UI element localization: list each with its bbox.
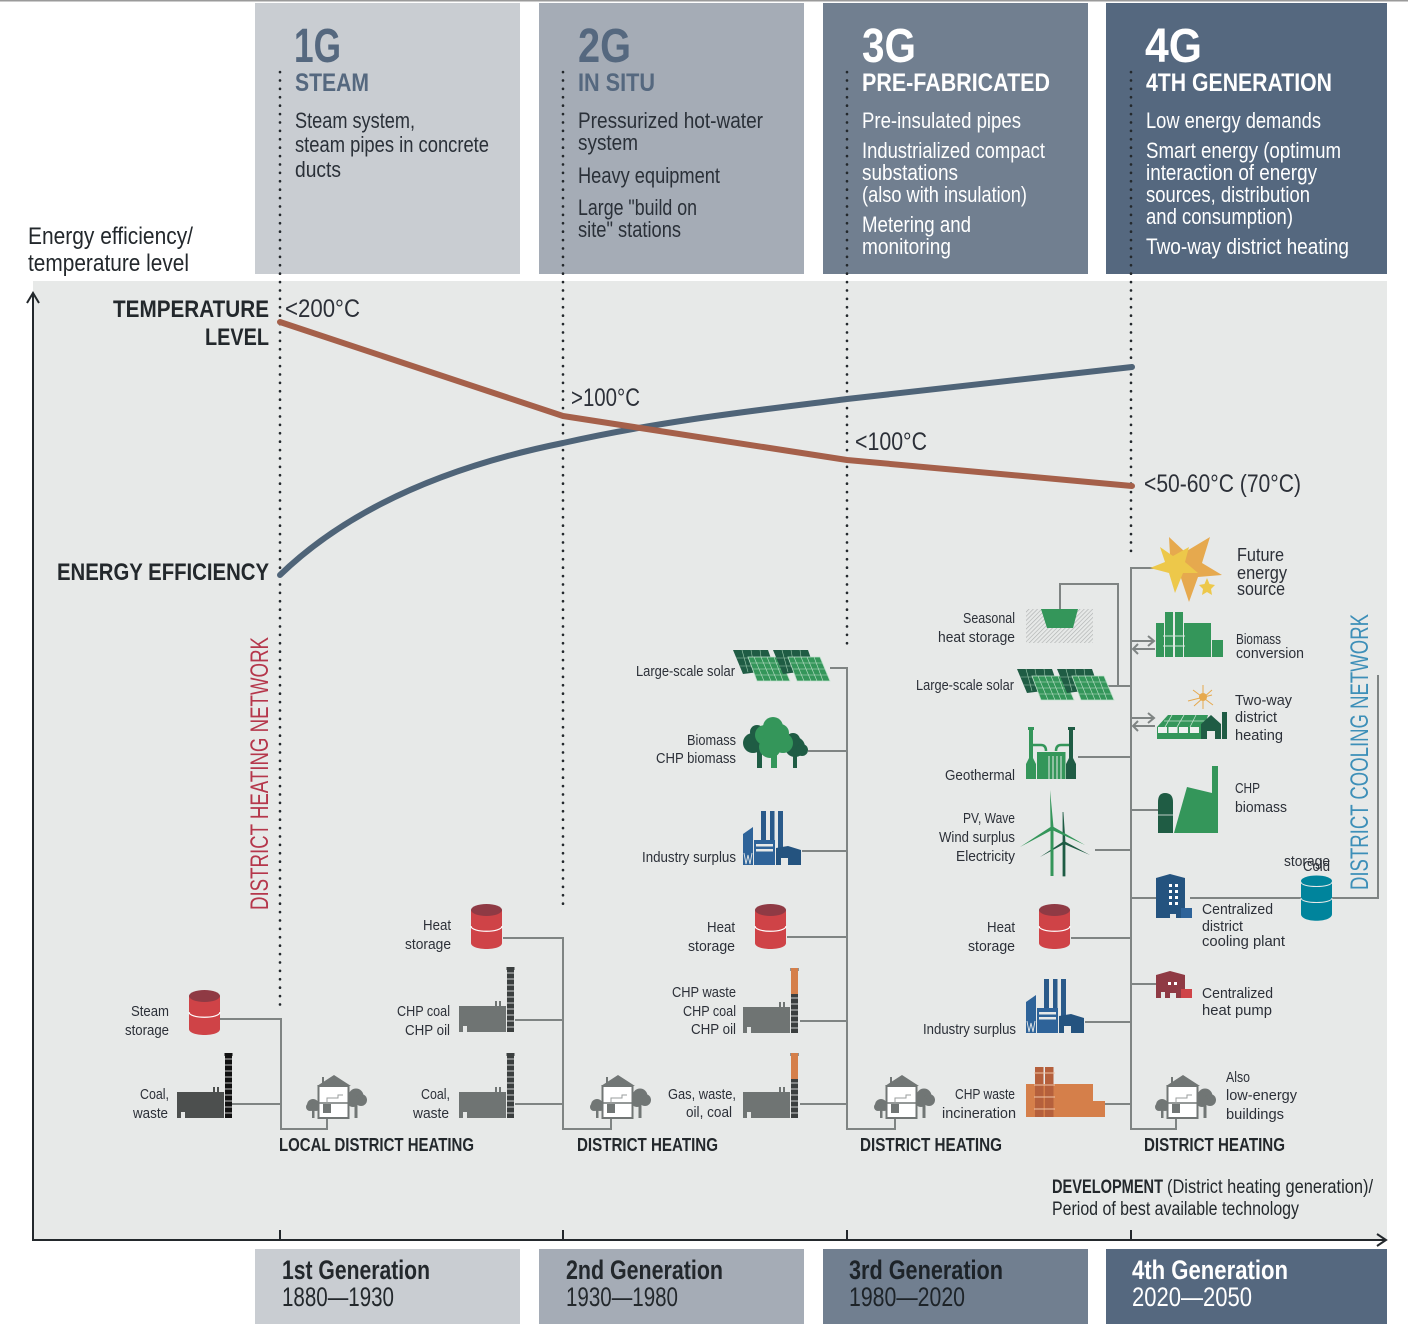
icon: CHP waste incineration plant	[1026, 1067, 1105, 1117]
icon: seasonal heat storage	[1026, 609, 1093, 643]
label: two-way district heating: heating	[1235, 727, 1283, 744]
panel: 3G pre-fabricated: Industrialized compact	[862, 138, 1045, 163]
label: cold storage: storage	[1284, 853, 1330, 870]
panel: 4G 4th generation: Low energy demands	[1146, 108, 1321, 133]
label: temperature level: TEMPERATURE	[113, 296, 269, 323]
label: industry surplus 3G: Industry surplus	[642, 849, 736, 866]
icon: centralized heat pump	[1156, 971, 1192, 998]
label: coal, waste 2G: waste	[412, 1105, 449, 1122]
icon: house 2G	[590, 1075, 651, 1118]
panel: 4G 4th generation: 4TH GENERATION	[1146, 69, 1332, 97]
axis title: energy efficiency / temperature level: Energy efficiency/	[28, 223, 193, 250]
panel: 4G 4th generation: sources, distribution	[1146, 182, 1310, 207]
label: CHP waste incineration: incineration	[942, 1105, 1016, 1122]
label: two-way district heating: district	[1235, 709, 1278, 726]
icon: future energy star	[1150, 537, 1222, 602]
panel: 3G pre-fabricated: (also with insulation)	[862, 182, 1027, 207]
label: biomass conversion: conversion	[1236, 645, 1304, 662]
label: also low-energy buildings	[1226, 1069, 1297, 1123]
label: CHP coal / oil 2G	[397, 1003, 450, 1039]
panel: 4G 4th generation: Smart energy (optimum	[1146, 138, 1341, 163]
line: energy efficiency curve	[280, 367, 1132, 575]
label: future energy source: source	[1237, 579, 1285, 599]
label: seasonal heat storage: Seasonal	[963, 610, 1015, 627]
label: two-way district heating	[1235, 692, 1292, 744]
label: gas, waste, oil, coal	[668, 1086, 736, 1121]
label: CHP coal / oil 2G: CHP oil	[405, 1022, 450, 1039]
arrows: two-way biomass conversion	[1131, 636, 1155, 654]
vertical label: district heating network: DISTRICT HEATING NETWORK	[246, 637, 274, 910]
panel: 2G in situ: Heavy equipment	[578, 163, 720, 188]
heading: district heating 3G: DISTRICT HEATING	[860, 1135, 1002, 1155]
footer: 1st generation: 1880—1930	[282, 1282, 394, 1312]
panel: 3G pre-fabricated: PRE-FABRICATED	[862, 69, 1050, 97]
panel: 1G steam: STEAM	[295, 69, 369, 97]
label: biomass, CHP biomass: CHP biomass	[656, 750, 736, 767]
label: temperature level: LEVEL	[205, 324, 269, 351]
footer: 3rd generation	[823, 1249, 1088, 1324]
footer: 4th generation: 4th Generation	[1132, 1255, 1288, 1285]
label: PV, wave, wind surplus electricity	[939, 810, 1015, 865]
panel: 4G 4th generation: Two-way district heating	[1146, 234, 1349, 259]
label: coal, waste 2G	[412, 1086, 450, 1122]
icon: industry 3G	[743, 811, 801, 865]
arrows: two-way district heating	[1131, 713, 1155, 731]
axes with arrows	[27, 293, 1386, 1246]
label: CHP waste, coal, oil: CHP coal	[683, 1003, 736, 1020]
footer: 2nd generation: 2nd Generation	[566, 1255, 723, 1285]
panel: 4G 4th generation: and consumption)	[1146, 204, 1293, 229]
label: CHP waste incineration: CHP waste	[955, 1086, 1015, 1103]
label: centralized district cooling plant: district	[1202, 918, 1244, 935]
network lines: 3rd generation	[787, 668, 895, 1129]
icon: cold storage barrel	[1301, 876, 1332, 921]
panel: 2G in situ: site" stations	[578, 217, 681, 242]
label: temperature level	[113, 296, 269, 351]
icon: heat storage barrel 4G	[1039, 904, 1070, 949]
label: gas, waste, oil, coal: oil, coal	[686, 1104, 732, 1121]
icon: coal factory 2G	[459, 1053, 514, 1118]
label: centralized heat pump	[1202, 985, 1273, 1019]
label: PV, wave, wind surplus electricity: Electricity	[956, 848, 1015, 865]
icon: CHP biomass plant	[1158, 766, 1218, 833]
label: heat storage 3G: storage	[688, 938, 735, 955]
icon: geothermal plant	[1026, 727, 1076, 779]
icon: heat storage barrel 2G	[471, 904, 502, 949]
label: CHP biomass 4G	[1235, 780, 1287, 816]
x-axis caption: development	[1052, 1177, 1374, 1220]
label: also low-energy buildings: low-energy	[1226, 1087, 1297, 1104]
label: gas, waste, oil, coal: Gas, waste,	[668, 1086, 736, 1103]
label: coal, waste 1G: Coal,	[140, 1086, 169, 1103]
icon: house 4G	[1155, 1075, 1216, 1118]
panel: 2G in situ: Large "build on	[578, 195, 697, 220]
panel: 1G steam: 1G	[294, 20, 341, 73]
vertical label: district cooling network: DISTRICT COOLING NETWORK	[1346, 614, 1374, 890]
label: large-scale solar 4G: Large-scale solar	[916, 677, 1014, 694]
icon: steam storage barrel	[189, 990, 220, 1035]
x-axis caption: development: Period of best available technology	[1052, 1199, 1299, 1220]
label: CHP waste, coal, oil: CHP oil	[691, 1021, 736, 1038]
temperature values	[285, 295, 1301, 498]
panel: chart background	[33, 281, 1387, 1240]
panel: 3G pre-fabricated: Metering and	[862, 212, 971, 237]
axis title: energy efficiency / temperature level	[28, 223, 193, 277]
label: steam storage	[125, 1003, 169, 1039]
label: seasonal heat storage: heat storage	[938, 629, 1015, 646]
label: biomass, CHP biomass	[656, 732, 736, 767]
label: heat storage 2G: storage	[405, 936, 451, 953]
label: heat storage 3G: Heat	[707, 919, 736, 936]
icon: industry 4G	[1026, 979, 1084, 1033]
label: heat storage 2G	[405, 917, 452, 953]
footer: 3rd generation: 1980—2020	[849, 1282, 965, 1312]
icon: heat storage barrel 3G	[755, 904, 786, 949]
label: centralized district cooling plant: Centralized	[1202, 901, 1273, 918]
icon: trees biomass	[743, 717, 808, 768]
label: centralized district cooling plant: cooling plant	[1202, 933, 1286, 950]
label: also low-energy buildings: buildings	[1226, 1106, 1284, 1123]
label: seasonal heat storage	[938, 610, 1015, 646]
heading: district heating 4G: DISTRICT HEATING	[1144, 1135, 1285, 1155]
label: biomass, CHP biomass: Biomass	[687, 732, 736, 749]
label: geothermal: Geothermal	[945, 767, 1015, 784]
label: PV, wave, wind surplus electricity: PV, Wave	[963, 810, 1015, 827]
generation dotted dividers	[280, 72, 1131, 1012]
label: CHP biomass 4G: biomass	[1235, 799, 1287, 816]
label: future energy source: Future	[1237, 545, 1284, 565]
network lines: 1st generation	[220, 1019, 327, 1129]
label: biomass conversion	[1236, 631, 1304, 662]
panel: 2G in situ: system	[578, 130, 638, 155]
heading: local district heating: LOCAL DISTRICT HEATING	[279, 1135, 474, 1155]
icon: two-way district heating house	[1157, 685, 1227, 739]
network lines: 2nd generation	[503, 938, 611, 1129]
label: CHP biomass 4G: CHP	[1235, 780, 1260, 797]
label: heat storage 4G	[968, 919, 1016, 955]
label: future energy source: energy	[1237, 563, 1287, 583]
panel: 4G 4th generation: interaction of energy	[1146, 160, 1317, 185]
panel: 2G in situ: IN SITU	[578, 69, 655, 97]
label: also low-energy buildings: Also	[1226, 1069, 1250, 1086]
heading: district heating 2G: DISTRICT HEATING	[577, 1135, 718, 1155]
icon: coal factory 1G	[177, 1053, 232, 1118]
icon: house 3G	[874, 1075, 935, 1118]
label: PV, wave, wind surplus electricity: Wind surplus	[939, 829, 1015, 846]
label: future energy source	[1237, 545, 1287, 599]
label: CHP waste incineration	[942, 1086, 1016, 1122]
footer: 2nd generation: 1930—1980	[566, 1282, 678, 1312]
panel: 3G pre-fabricated: substations	[862, 160, 958, 185]
panel: 1G steam: steam pipes in concrete	[295, 132, 489, 157]
icon: large-scale solar 4G	[1017, 669, 1114, 700]
label: CHP waste, coal, oil	[672, 984, 736, 1038]
label: cold storage: Cold	[1303, 858, 1330, 875]
label: heat storage 3G	[688, 919, 736, 955]
label: centralized district cooling plant	[1202, 901, 1286, 950]
footer: 1st generation: 1st Generation	[282, 1255, 430, 1285]
label: energy efficiency: ENERGY EFFICIENCY	[57, 559, 269, 586]
label: heat storage 4G: Heat	[987, 919, 1016, 936]
label: steam storage: Steam	[131, 1003, 169, 1020]
icon: centralized cooling building	[1156, 874, 1192, 918]
label: CHP coal / oil 2G: CHP coal	[397, 1003, 450, 1020]
label: steam storage: storage	[125, 1022, 169, 1039]
temperature values: >100°C	[571, 384, 640, 412]
footer: 1st generation	[255, 1249, 520, 1324]
temperature values: <50-60°C (70°C)	[1144, 470, 1301, 498]
label: centralized heat pump: Centralized	[1202, 985, 1273, 1002]
icon: CHP factory 2G	[459, 967, 514, 1032]
temperature values: <200°C	[285, 295, 360, 323]
network lines: 4th generation	[1060, 568, 1378, 1129]
label: coal, waste 1G: waste	[132, 1105, 168, 1122]
panel: 4G 4th generation	[1106, 3, 1387, 274]
footer: 4th generation: 2020—2050	[1132, 1282, 1252, 1312]
icon: CHP factory 3G	[743, 968, 798, 1033]
temperature values: <100°C	[855, 428, 927, 456]
panel: 1G steam: ducts	[295, 157, 341, 182]
line: temperature level curve	[280, 322, 1132, 486]
panel: 3G pre-fabricated: monitoring	[862, 234, 951, 259]
x-axis caption: development: DEVELOPMENT	[1052, 1177, 1163, 1198]
panel: 3G pre-fabricated	[823, 3, 1088, 274]
label: industry surplus 4G: Industry surplus	[923, 1021, 1016, 1038]
label: coal, waste 2G: Coal,	[421, 1086, 450, 1103]
icon: house 1G	[306, 1075, 367, 1118]
label: heat storage 4G: storage	[968, 938, 1015, 955]
icon: large-scale solar 3G	[733, 650, 830, 681]
label: heat storage 2G: Heat	[423, 917, 452, 934]
axis title: energy efficiency / temperature level: temperature level	[28, 250, 189, 277]
label: centralized heat pump: heat pump	[1202, 1002, 1272, 1019]
panel: 4G 4th generation: 4G	[1145, 20, 1202, 73]
panel: 1G steam	[255, 3, 520, 274]
panel: 3G pre-fabricated: 3G	[862, 20, 916, 73]
label: coal, waste 1G	[132, 1086, 169, 1122]
label: CHP waste, coal, oil: CHP waste	[672, 984, 736, 1001]
panel: 2G in situ: Pressurized hot-water	[578, 108, 763, 133]
footer: 4th generation	[1106, 1249, 1387, 1324]
x-axis caption: development: (District heating generation)/	[1167, 1177, 1374, 1198]
label: two-way district heating: Two-way	[1235, 692, 1292, 709]
footer: 2nd generation	[539, 1249, 804, 1324]
footer: 3rd generation: 3rd Generation	[849, 1255, 1003, 1285]
panel: 1G steam: Steam system,	[295, 108, 415, 133]
icon: wind turbines	[1020, 790, 1090, 876]
icon: gas factory 3G	[743, 1053, 798, 1118]
panel: 3G pre-fabricated: Pre-insulated pipes	[862, 108, 1021, 133]
panel: 2G in situ: 2G	[578, 20, 631, 73]
label: large-scale solar 3G: Large-scale solar	[636, 663, 735, 680]
panel: 2G in situ	[539, 3, 804, 274]
icon: biomass conversion plant	[1156, 612, 1223, 657]
label: biomass conversion: Biomass	[1236, 631, 1281, 648]
